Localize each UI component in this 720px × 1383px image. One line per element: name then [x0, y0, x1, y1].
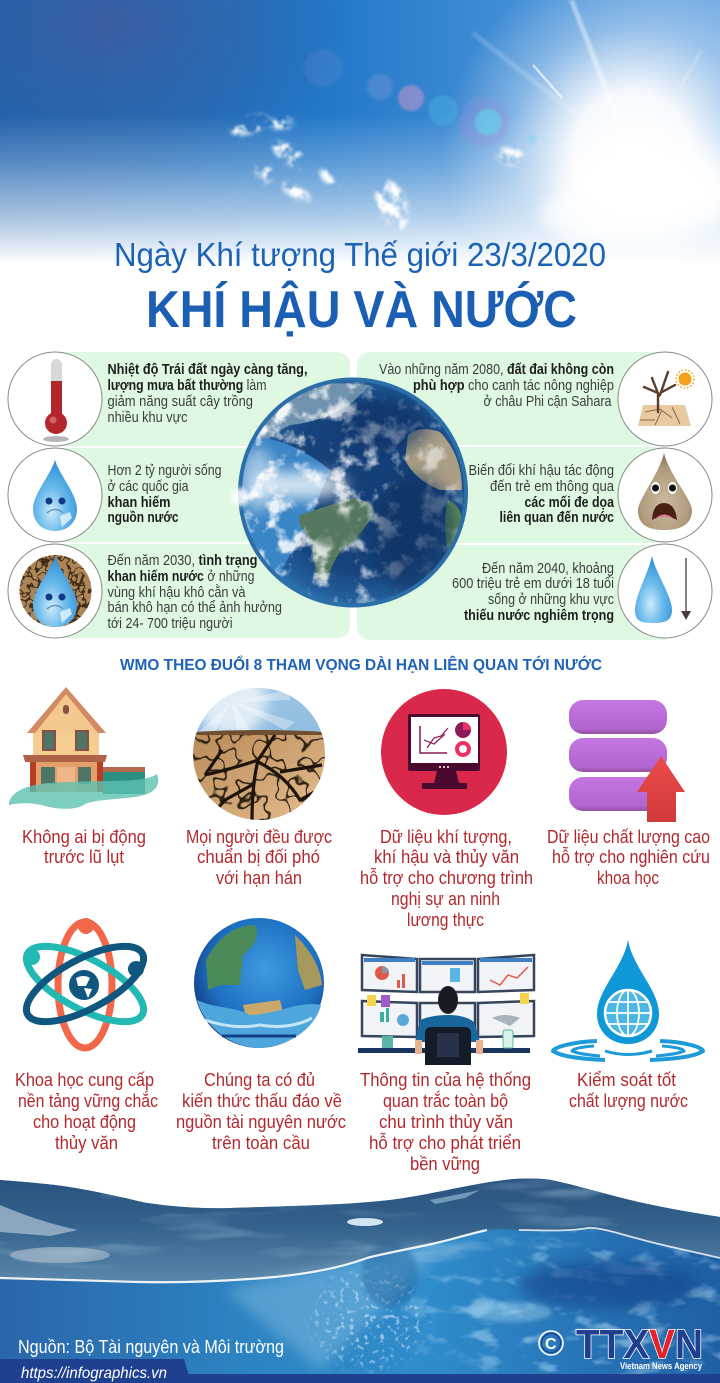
right fact text 3: Đến năm 2040, khoảng — [482, 560, 614, 577]
left fact text 2: nguồn nước — [108, 509, 178, 526]
left fact text 2: khan hiếm — [108, 494, 170, 511]
caption 6: kiến thức thấu đáo về — [182, 1091, 342, 1111]
caption 4 — [547, 827, 710, 888]
caption 5: cho hoạt động — [33, 1112, 136, 1132]
caption 2: với hạn hán — [216, 868, 302, 888]
section heading: WMO THEO ĐUỔI 8 THAM VỌNG DÀI HẠN LIÊN QUAN TỚI NƯỚC — [120, 655, 602, 674]
sky banner with sun — [0, 0, 720, 272]
left fact text 3: Đến năm 2030, tình trạng — [108, 552, 258, 569]
icon: frightened muddy drop — [618, 448, 712, 542]
caption 3: lương thực — [407, 910, 484, 930]
icon: drop with down arrow — [618, 544, 712, 638]
icon: dead tree and sun — [618, 352, 712, 446]
website tab — [0, 1359, 191, 1383]
caption 3: Dữ liệu khí tượng, — [380, 827, 512, 847]
website tab: https://infographics.vn — [21, 1365, 167, 1382]
caption 2: Mọi người đều được — [186, 827, 332, 847]
title line: main heading: KHÍ HẬU VÀ NƯỚC — [146, 280, 577, 339]
title line: date: Ngày Khí tượng Thế giới 23/3/2020 — [114, 236, 606, 273]
caption 5: thủy văn — [55, 1133, 118, 1153]
right fact text 2: các mối đe dọa — [524, 494, 615, 511]
caption 1: trước lũ lụt — [44, 847, 124, 867]
earth globe — [231, 378, 468, 608]
right fact text 3: thiếu nước nghiêm trọng — [464, 607, 614, 624]
caption 6 — [176, 1070, 346, 1153]
caption 8 — [569, 1070, 688, 1111]
right fact text 1: ở châu Phi cận Sahara — [484, 393, 612, 410]
caption 3: khí hậu và thủy văn — [374, 847, 519, 867]
caption 5: Khoa học cung cấp — [15, 1070, 154, 1090]
source line: Nguồn: Bộ Tài nguyên và Môi trường — [18, 1337, 284, 1357]
caption 4: khoa học — [597, 868, 659, 888]
caption 7 — [360, 1070, 531, 1174]
panel: right facts background — [357, 352, 665, 640]
panel: left facts background — [55, 352, 350, 638]
caption 8: chất lượng nước — [569, 1091, 688, 1111]
logo: TTXVN: TTXVN — [576, 1321, 703, 1367]
right fact text 3: 600 triệu trẻ em dưới 18 tuổi — [452, 575, 614, 592]
caption 2 — [186, 827, 332, 888]
icon: thermometer — [8, 352, 102, 446]
water banner — [0, 1170, 720, 1383]
left fact text 1: nhiều khu vực — [108, 409, 188, 426]
icon: operator at monitoring screens — [358, 955, 534, 1065]
logo: TTXVN: C — [545, 1336, 557, 1353]
icon: water drop with globe and ripples — [553, 940, 703, 1060]
caption 7: hỗ trợ cho phát triển — [369, 1132, 521, 1153]
left fact text 1 — [108, 361, 308, 426]
left fact text 3: vùng khí hậu khô cằn và — [108, 584, 246, 601]
caption 1 — [22, 827, 146, 867]
right fact text 2: Biến đổi khí hậu tác động — [468, 462, 614, 479]
caption 3: hỗ trợ cho chương trình — [360, 867, 533, 888]
right fact text 2: đến trẻ em thông qua — [490, 478, 615, 495]
caption 7: Thông tin của hệ thống — [360, 1070, 531, 1090]
caption 8: Kiểm soát tốt — [577, 1070, 676, 1090]
footer bar — [0, 1374, 720, 1383]
icon: earth in water — [194, 918, 324, 1048]
icon: drop over cracked ground — [8, 544, 102, 638]
left fact text 1: giảm năng suất cây trồng — [108, 393, 253, 410]
icon: monitor with charts — [381, 689, 507, 815]
icon: sad water drop — [8, 448, 102, 542]
right fact text 2 — [468, 462, 615, 526]
right fact text 3: sống ở những khu vực — [488, 591, 614, 608]
caption 3: nghị sự an ninh — [391, 889, 500, 909]
caption 6: nguồn tài nguyên nước — [176, 1112, 346, 1132]
left fact text 3: khan hiếm nước ở những — [108, 568, 254, 585]
icon: atom with globe — [16, 918, 154, 1048]
left fact text 1: lượng mưa bất thường làm — [108, 377, 266, 394]
left fact text 3: tới 24- 700 triệu người — [108, 615, 232, 632]
icon: flooded house — [9, 687, 158, 809]
right fact text 1 — [379, 361, 614, 410]
logo: TTXVN: Vietnam News Agency — [620, 1361, 702, 1371]
caption 5: nền tảng vững chắc — [18, 1090, 158, 1111]
icon: data stack with arrow — [569, 700, 685, 822]
caption 6: trên toàn cầu — [212, 1133, 310, 1153]
caption 7: chu trình thủy văn — [379, 1112, 513, 1132]
right fact text 1: Vào những năm 2080, đất đai không còn — [379, 361, 614, 378]
left fact text 2: Hơn 2 tỷ người sống — [108, 462, 222, 479]
left fact text 3 — [108, 552, 282, 632]
left fact text 3: bán khô hạn có thể ảnh hưởng — [108, 599, 282, 616]
caption 5 — [15, 1070, 158, 1153]
left fact text 2 — [108, 462, 222, 526]
right fact text 2: liên quan đến nước — [500, 509, 614, 526]
left fact text 2: ở các quốc gia — [108, 478, 189, 495]
caption 7: quan trắc toàn bộ — [383, 1090, 508, 1111]
left fact text 1: Nhiệt độ Trái đất ngày càng tăng, — [108, 361, 308, 378]
caption 6: Chúng ta có đủ — [204, 1070, 315, 1090]
icon: drought landscape — [193, 688, 325, 820]
caption 7: bền vững — [410, 1154, 480, 1174]
caption 3 — [360, 827, 533, 930]
caption 2: chuẩn bị đối phó — [197, 847, 320, 867]
caption 1: Không ai bị động — [22, 827, 146, 847]
right fact text 1: phù hợp cho canh tác nông nghiệp — [413, 377, 614, 394]
right fact text 3 — [452, 560, 614, 624]
